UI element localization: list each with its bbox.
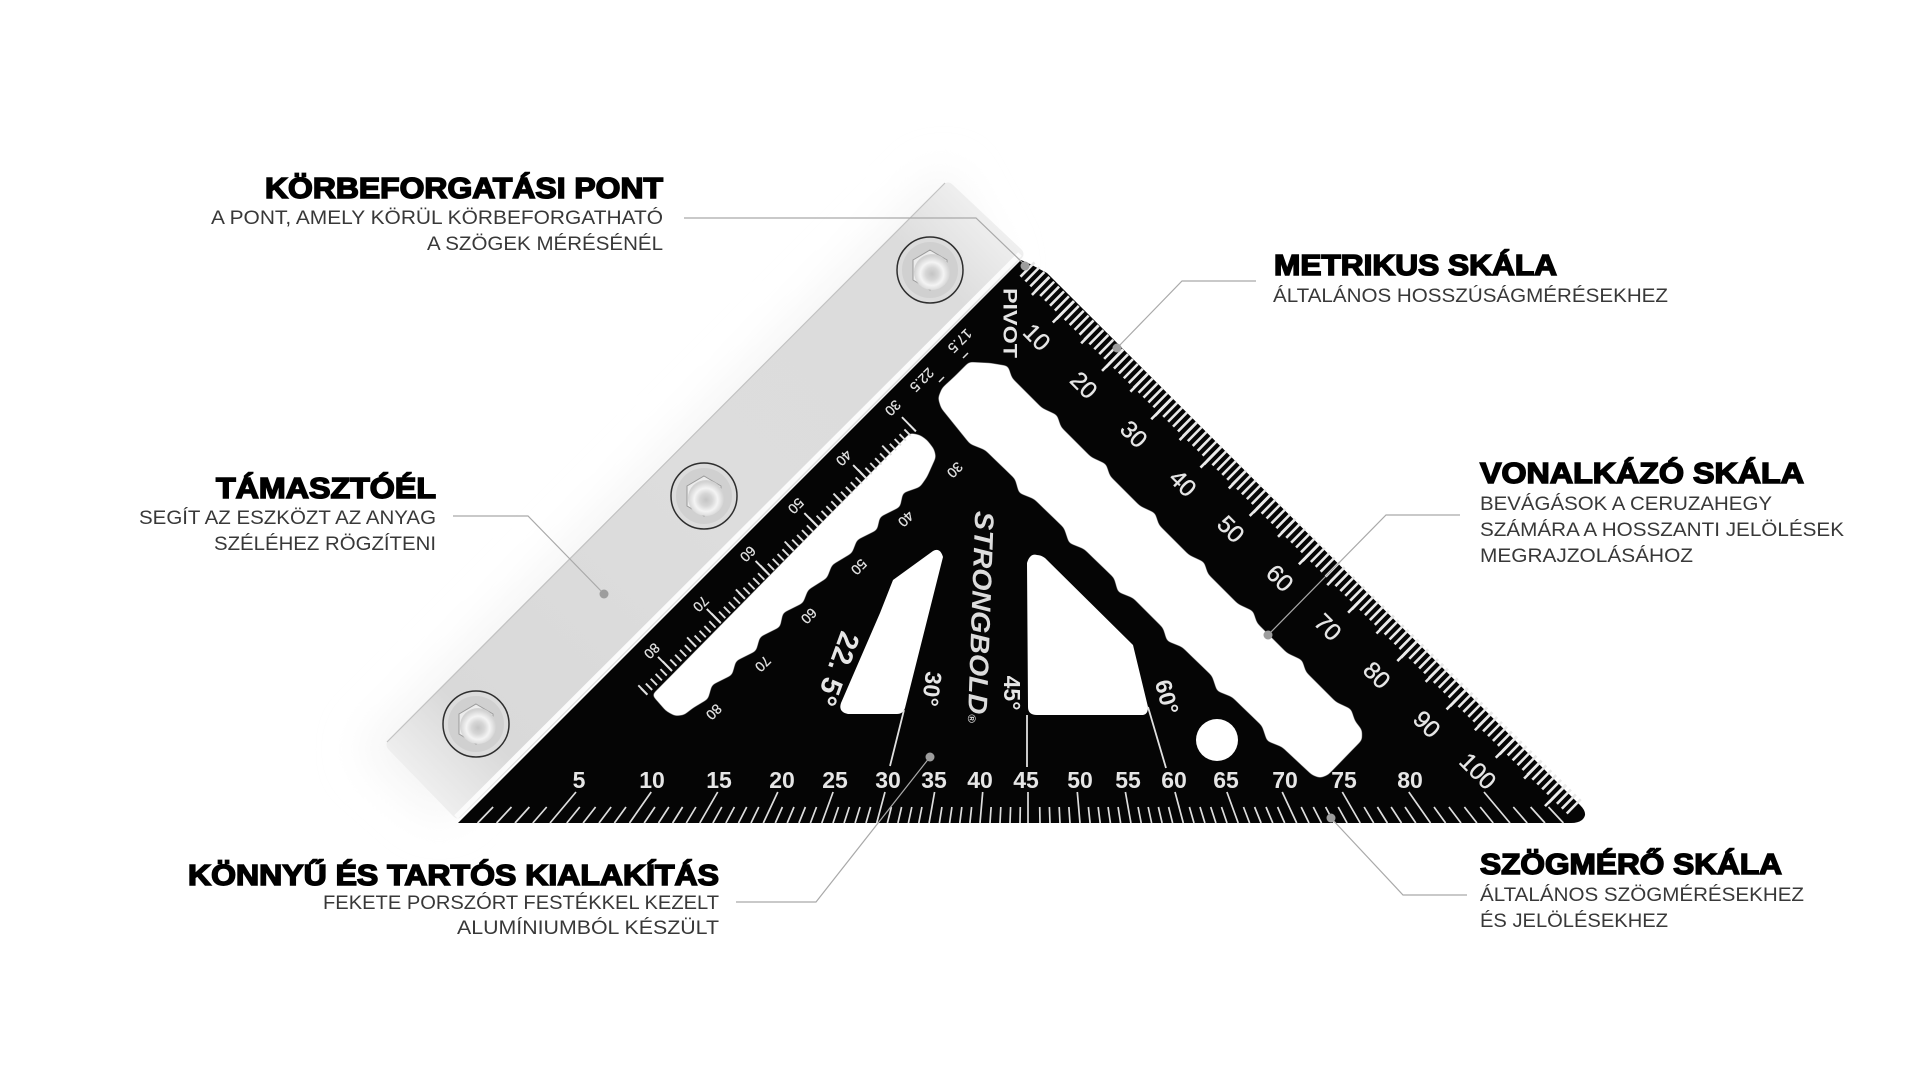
callout: metric scale: ÁLTALÁNOS HOSSZÚSÁGMÉRÉSEKHEZ (1273, 285, 1668, 307)
side scale numbers: 70 (690, 593, 712, 615)
fence bar: aluminium lip (386, 182, 1024, 818)
left window slot (652, 433, 936, 716)
callout: pivot point: A SZÖGEK MÉRÉSÉNÉL (427, 234, 663, 255)
protractor ticks (478, 792, 1563, 823)
inner slot numbers (703, 459, 966, 723)
leader: fence edge (453, 516, 608, 598)
metric scale numbers: 60 (1260, 560, 1298, 598)
long slot (938, 362, 1362, 778)
protractor numbers: 50 (1067, 767, 1093, 793)
protractor numbers: 30 (875, 767, 901, 793)
inner slot numbers: 70 (752, 653, 774, 675)
callout: light and durable design (188, 858, 719, 939)
inner slot numbers: 50 (848, 556, 870, 578)
soft shadow behind square (360, 170, 1000, 820)
inner slot numbers: 40 (895, 508, 917, 530)
protractor numbers: 15 (706, 767, 732, 793)
metric scale numbers: 10 (1017, 319, 1055, 357)
callout: fence edge: TÁMASZTÓÉL (216, 471, 436, 505)
inner slot numbers: 60 (798, 605, 820, 627)
callout: marking scale: BEVÁGÁSOK A CERUZAHEGY (1480, 494, 1772, 515)
side scale numbers (641, 326, 975, 662)
callout: pivot point: A PONT, AMELY KÖRÜL KÖRBEFORGATHATÓ (211, 207, 663, 229)
callout: light and durable design: FEKETE PORSZÓRT FESTÉKKEL KEZELT (323, 892, 719, 914)
protractor numbers: 80 (1397, 767, 1423, 793)
protractor numbers: 75 (1331, 767, 1357, 793)
angle labels: 45° (999, 676, 1025, 710)
leader: protractor scale (1326, 814, 1467, 895)
callout: fence edge (139, 471, 436, 555)
callout: protractor scale: ÁLTALÁNOS SZÖGMÉRÉSEKHEZ (1480, 885, 1804, 906)
callout: light and durable design: KÖNNYŰ ÉS TARTÓS KIALAKÍTÁS (188, 858, 719, 892)
protractor numbers: 10 (639, 767, 665, 793)
protractor numbers: 65 (1213, 767, 1239, 793)
black triangular body (458, 260, 1585, 823)
protractor numbers: 20 (769, 767, 795, 793)
rafter square tool (386, 182, 1585, 823)
callout: metric scale (1273, 248, 1668, 307)
triangular window 45-60 (1027, 555, 1148, 715)
protractor numbers: 60 (1161, 767, 1187, 793)
side scale numbers: 17.5 (945, 326, 975, 357)
inner slot numbers: 30 (944, 459, 966, 481)
callout: protractor scale (1480, 847, 1804, 932)
callout: pivot point: KÖRBEFORGATÁSI PONT (265, 171, 663, 205)
STRONGBOLD logo: STRONGBOLD ® (962, 511, 999, 724)
protractor numbers: 25 (822, 767, 848, 793)
side scale numbers: 60 (737, 543, 759, 565)
callout: protractor scale: SZÖGMÉRŐ SKÁLA (1480, 847, 1782, 881)
angle labels: 22. 5° (809, 627, 865, 710)
degree guide lines (890, 707, 1166, 768)
side scale numbers: 40 (833, 447, 855, 469)
side scale numbers: 50 (785, 495, 807, 517)
metric scale numbers (1017, 319, 1501, 795)
side scale numbers: 30 (882, 397, 904, 419)
metric scale numbers: 50 (1211, 511, 1249, 549)
callout: fence edge: SZÉLÉHEZ RÖGZÍTENI (214, 534, 436, 555)
inner slot numbers: 80 (703, 701, 725, 723)
metric scale numbers: 90 (1407, 706, 1445, 744)
side scale numbers: 80 (641, 640, 663, 662)
callout: pivot point (211, 171, 663, 255)
leader: marking scale (1264, 515, 1460, 640)
metric scale numbers: 20 (1064, 367, 1102, 405)
protractor numbers (573, 767, 1423, 793)
screw 3 (443, 691, 509, 757)
screw 1 (897, 237, 963, 303)
protractor numbers: 70 (1272, 767, 1298, 793)
leader: pivot point (684, 218, 1030, 270)
metric scale ticks (1023, 269, 1576, 812)
protractor numbers: 45 (1013, 767, 1039, 793)
round hole (1196, 719, 1238, 761)
callout: marking scale: VONALKÁZÓ SKÁLA (1480, 456, 1804, 490)
PIVOT marking: PIVOT (998, 288, 1019, 358)
angle labels: 30° (917, 670, 947, 708)
callout: protractor scale: ÉS JELÖLÉSEKHEZ (1480, 911, 1668, 932)
metric scale numbers: 70 (1308, 609, 1346, 647)
screw 2 (671, 463, 737, 529)
protractor numbers: 40 (967, 767, 993, 793)
protractor numbers: 55 (1115, 767, 1141, 793)
protractor numbers: 35 (921, 767, 947, 793)
callout: marking scale: MEGRAJZOLÁSÁHOZ (1480, 546, 1693, 567)
angle labels (809, 627, 1184, 717)
triangular window 22.5 (840, 550, 943, 714)
leader: light and durable design (736, 752, 934, 902)
callout: light and durable design: ALUMÍNIUMBÓL KÉSZÜLT (457, 917, 719, 939)
leader: metric scale (1112, 281, 1256, 352)
side scale numbers: 22.5 (907, 365, 937, 396)
callout: fence edge: SEGÍT AZ ESZKÖZT AZ ANYAG (139, 508, 436, 529)
callout: marking scale (1480, 456, 1844, 567)
side scale ticks (639, 424, 913, 694)
callout: marking scale: SZÁMÁRA A HOSSZANTI JELÖLÉSEK (1480, 520, 1844, 541)
angle labels: 60° (1150, 677, 1184, 717)
metric scale numbers: 80 (1357, 657, 1395, 695)
protractor numbers: 5 (573, 767, 586, 793)
metric scale numbers: 40 (1163, 465, 1201, 503)
metric scale numbers: 100 (1454, 748, 1501, 795)
metric scale numbers: 30 (1114, 416, 1152, 454)
callout: metric scale: METRIKUS SKÁLA (1274, 248, 1557, 282)
